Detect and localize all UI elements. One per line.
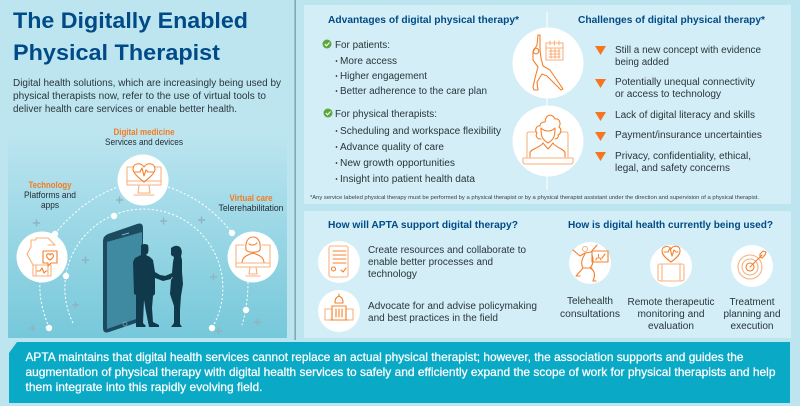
text: create resources [368, 245, 526, 280]
orbit dots [46, 213, 249, 331]
label: virtual care: Virtual care [230, 193, 272, 204]
list: for patients [322, 40, 487, 97]
label: technology: apps [41, 200, 59, 211]
label: virtual care: Telerehabilitation [218, 203, 284, 214]
phone [103, 224, 143, 332]
use: remote monitoring: evaluation [648, 321, 694, 332]
callout: APTA position statement: them integrate into this rapidly evolving field. [26, 380, 262, 394]
silhouette: two people shaking hands [133, 244, 183, 327]
intro text [13, 78, 281, 115]
icon: tablet checklist [318, 241, 360, 283]
use: treatment planning: Treatment [730, 297, 775, 308]
icon: government building [318, 290, 360, 332]
callout: APTA position statement: augmentation of physical therapy with digital health services to safely and efficiently expand the scope of work for physical therapists and help [26, 365, 776, 379]
label: digital medicine [105, 127, 183, 148]
use: treatment planning [724, 245, 780, 332]
panel: advantages and challenges [304, 5, 791, 204]
icon: therapist at laptop [512, 106, 584, 176]
list: for physical therapists: Advance quality of care [340, 142, 444, 153]
use: telehealth consultations [560, 242, 620, 320]
list: for patients: For patients: [335, 40, 390, 51]
use: remote monitoring: Remote therapeutic [628, 297, 714, 308]
label: technology: Platforms and [24, 190, 76, 201]
heading: advantages: Advantages of digital physical therapy* [328, 14, 520, 26]
callout: APTA position statement [9, 342, 790, 403]
label: technology: Technology [28, 180, 72, 191]
orbit arcs [40, 187, 248, 328]
icon: yoga pose and calendar [512, 28, 584, 98]
list: challenges [595, 45, 762, 174]
list: challenges: Still a new concept with evidence [615, 45, 761, 56]
list: for patients: More access [340, 56, 397, 67]
list: challenges: Lack of digital literacy and skills [615, 110, 755, 121]
intro text: physical therapists now, refer to the use of virtual tools to [13, 91, 266, 102]
title: Physical Therapist [13, 40, 221, 65]
intro text: Digital health solutions, which are increasingly being used by [13, 78, 281, 89]
list: for patients: Better adherence to the care plan [340, 86, 487, 97]
icon: virtual care monitor [228, 232, 278, 282]
heading: challenges: Challenges of digital physical therapy* [578, 14, 766, 26]
list: challenges: Payment/insurance uncertainties [615, 130, 762, 141]
use: telehealth consultations: consultations [560, 309, 620, 320]
panel: digital physical therapist illustration [8, 127, 287, 338]
heading: APTA support: How will APTA support digital therapy? [328, 219, 518, 231]
list: challenges: Privacy, confidentiality, ethical, [615, 151, 751, 162]
list: for physical therapists: Insight into patient health data [340, 174, 475, 185]
text: create resources: enable better processes and [368, 257, 493, 268]
list: challenges: being added [615, 57, 669, 68]
label: virtual care [218, 193, 284, 214]
list: for physical therapists: Scheduling and workspace flexibility [340, 126, 501, 137]
list: for patients: Higher engagement [340, 71, 427, 82]
icon: technology wearable [16, 232, 68, 282]
label: digital medicine: Services and devices [105, 137, 183, 148]
intro text: deliver health care services or enable better health. [13, 104, 237, 115]
footnote: *Any service labeled physical therapy must be performed by a physical therapist or by a physical therapist assistant under the direction and supervision of a physical therapist. [310, 195, 759, 201]
title [13, 8, 248, 65]
heading: current use: How is digital health currently being used? [568, 219, 773, 231]
text: create resources: technology [368, 269, 417, 280]
use: remote monitoring [628, 245, 714, 332]
text: advocate [368, 301, 537, 324]
label: digital medicine: Digital medicine [114, 127, 174, 138]
list: for physical therapists: For physical therapists: [335, 109, 437, 120]
list: for physical therapists: New growth opportunities [340, 158, 455, 169]
plus markers [29, 196, 261, 334]
use: remote monitoring: monitoring and [638, 309, 704, 320]
list: challenges: Potentially unequal connectivity [615, 77, 755, 88]
use: telehealth consultations: Telehealth [567, 296, 613, 307]
text: advocate: and best practices in the field [368, 313, 498, 324]
use: treatment planning: planning and [724, 309, 780, 320]
list: challenges: legal, and safety concerns [615, 163, 730, 174]
callout: APTA position statement: APTA maintains that digital health services cannot replace an actual physical therapist; however, the association supports and guides the [26, 350, 744, 364]
panel: APTA support and current use [304, 211, 791, 338]
list: for physical therapists [324, 108, 501, 185]
use: treatment planning: execution [730, 321, 774, 332]
label: technology [24, 180, 76, 211]
text: create resources: Create resources and collaborate to [368, 245, 526, 256]
list: challenges: or access to technology [615, 89, 721, 100]
title: The Digitally Enabled [13, 8, 248, 33]
text: advocate: Advocate for and advise policymaking [368, 301, 537, 312]
icon: digital medicine monitor [118, 154, 168, 206]
